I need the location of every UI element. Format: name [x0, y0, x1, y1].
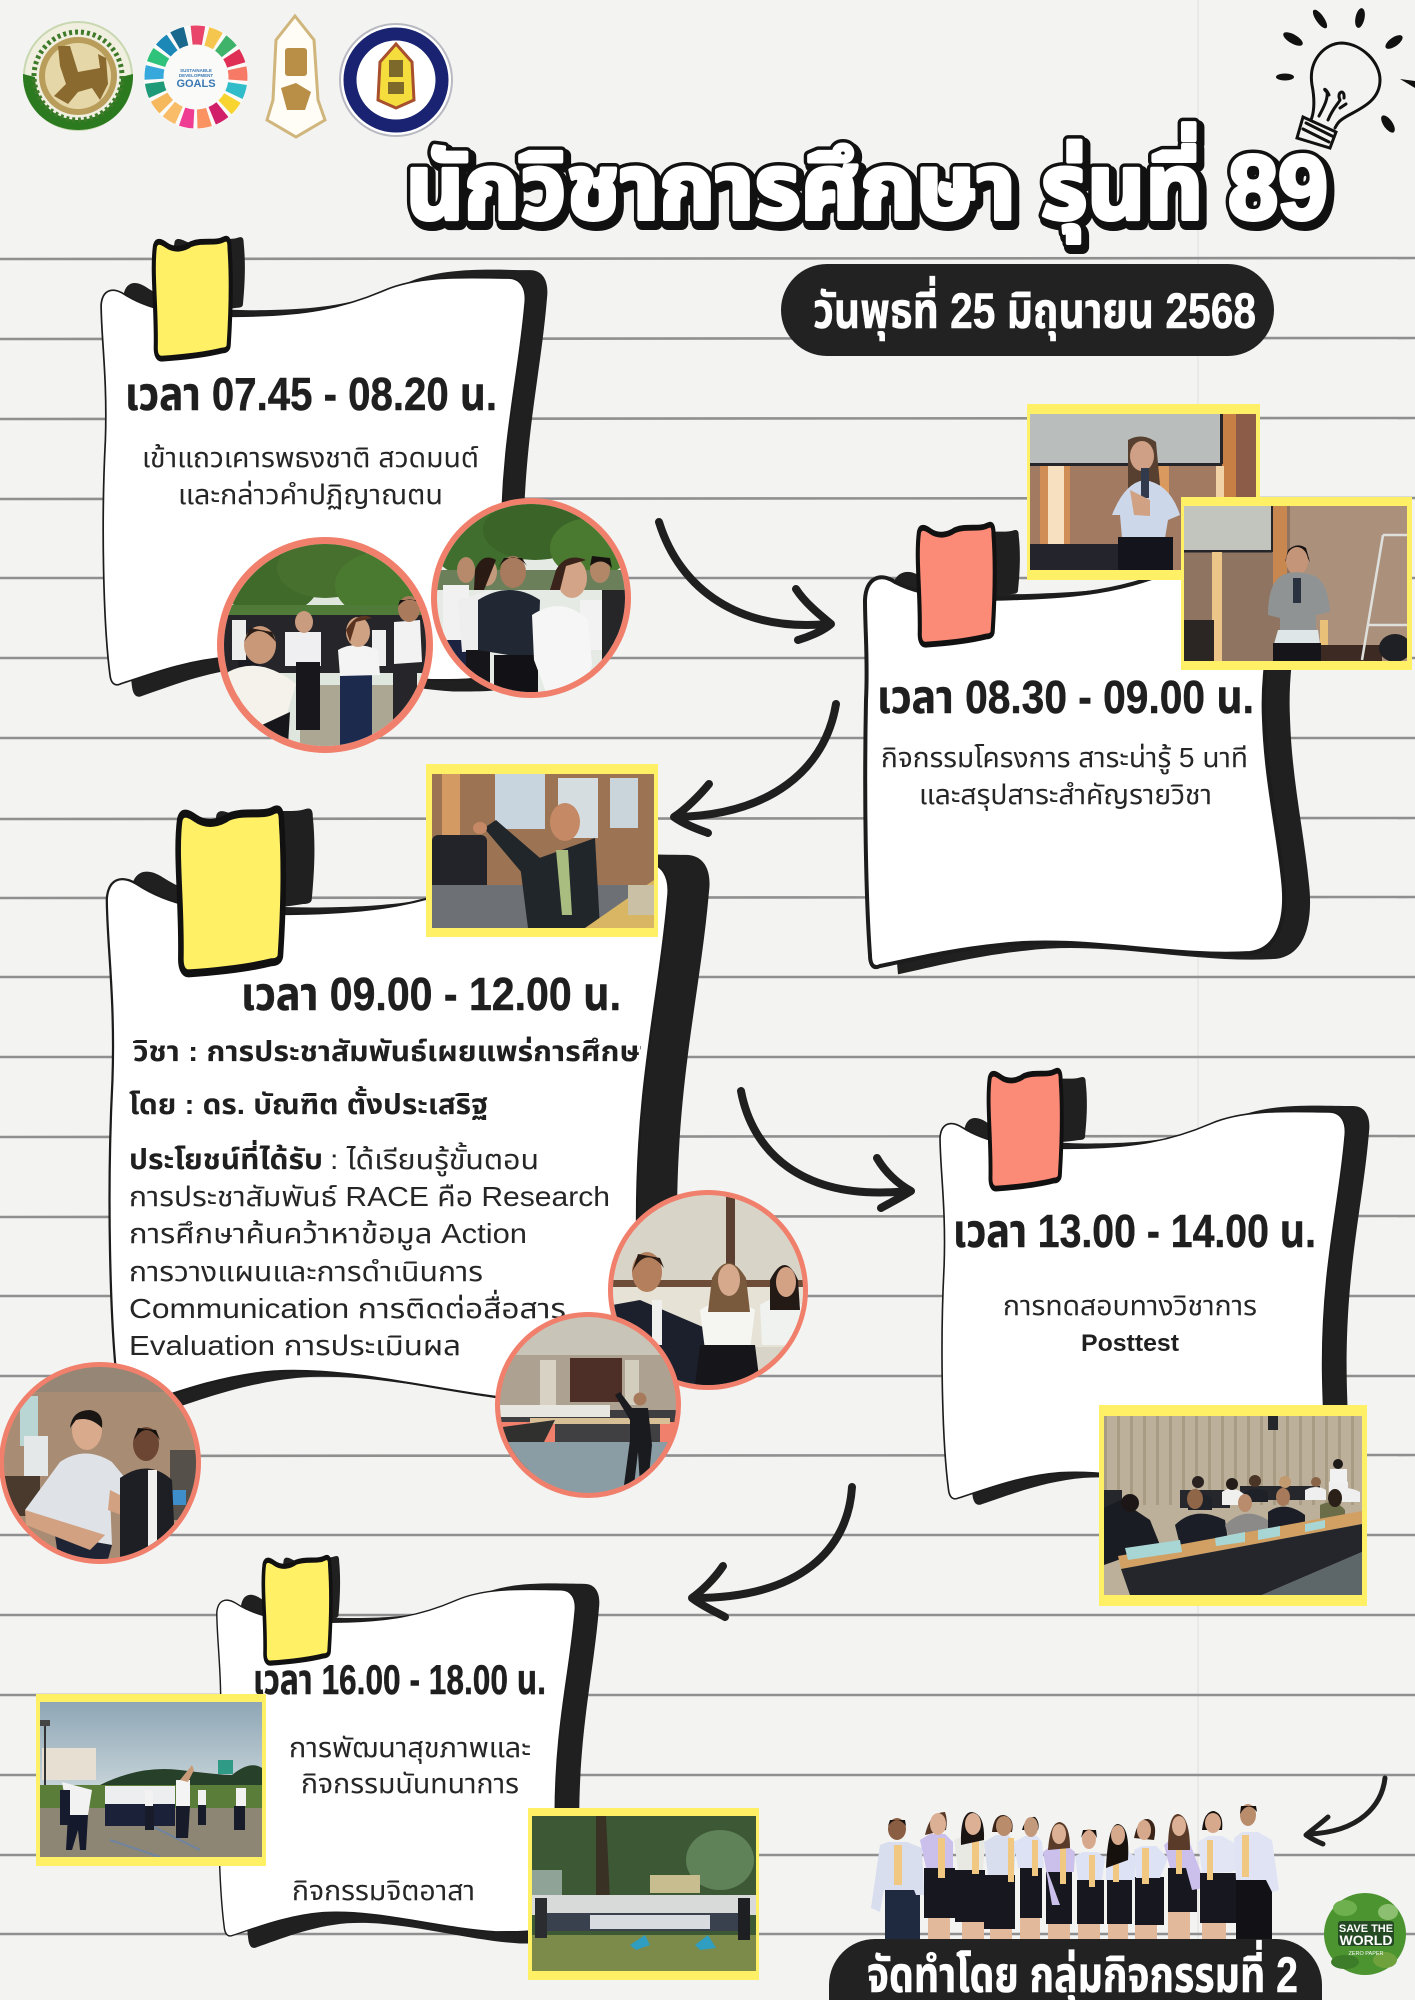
photo circle: three women seated: [608, 1190, 808, 1390]
panel: 16.00-18.00 activities: [36, 1556, 759, 1980]
time heading: เวลา 13.00 - 14.00 น.: [953, 1205, 1316, 1257]
photo circle: students in line: [431, 498, 631, 700]
paper shape: [101, 270, 547, 697]
arrow: first to second: [659, 522, 831, 640]
tape: yellow: [178, 808, 314, 973]
tape: yellow: [154, 237, 245, 359]
logo: sustainable development goals wheel: [137, 18, 255, 136]
photo: outdoor exercise: [36, 1694, 266, 1866]
photo: volunteer group under trees: [528, 1808, 759, 1980]
benefits paragraph: การประชาสัมพันธ์ RACE คือ Research: [129, 1181, 610, 1212]
description: และกล่าวคำปฏิญาณตน: [178, 479, 443, 510]
photo circle: meeting room: [495, 1312, 682, 1500]
photo: exam room: [1099, 1405, 1367, 1606]
benefits paragraph: : ได้เรียนรู้ขั้นตอน: [330, 1142, 539, 1177]
description: กิจกรรมนันทนาการ: [301, 1768, 519, 1799]
paper shape: [865, 545, 1310, 974]
benefits paragraph: การศึกษาค้นคว้าหาข้อมูล Action: [129, 1218, 527, 1251]
time heading: เวลา 07.45 - 08.20 น.: [125, 368, 497, 420]
logo: department of local administration: [23, 22, 133, 130]
photo: student speaker: [1027, 404, 1260, 580]
time heading: เวลา 08.30 - 09.00 น.: [877, 671, 1254, 723]
tape: salmon: [918, 525, 1020, 645]
photo circle: crowd under trees: [217, 537, 435, 753]
badge: save the world zero paper: [1324, 1893, 1406, 1975]
panel: morning assembly 07.45-08.20: [101, 237, 631, 753]
paper shape: [217, 1583, 599, 1948]
badge: save the world zero paper: SAVE THE: [1339, 1923, 1393, 1935]
logo: sustainable development goals wheel: SUSTAINABLE: [180, 68, 212, 73]
description: เข้าแถวเคารพธงชาติ สวดมนต์: [142, 442, 479, 473]
paper shape: [107, 854, 710, 1415]
time heading: เวลา 16.00 - 18.00 น.: [253, 1656, 546, 1703]
arrow: toward group photo: [1306, 1778, 1385, 1844]
title: นักวิชาการศึกษา รุ่นที่ 89: [406, 123, 1328, 243]
description: กิจกรรมโครงการ สาระน่ารู้ 5 นาที: [881, 742, 1248, 775]
description: [289, 1732, 531, 1906]
arrow: fourth to fifth: [692, 1487, 852, 1617]
photo: teacher speaker: [1181, 497, 1412, 670]
logo: sustainable development goals wheel: GOALS: [176, 78, 216, 90]
badge: save the world zero paper: WORLD: [1340, 1932, 1392, 1948]
panel: 09.00-12.00 lecture: [0, 764, 808, 1570]
title: นักวิชาการศึกษา รุ่นที่ 89: [406, 123, 1328, 243]
title: นักวิชาการศึกษา รุ่นที่ 89: [409, 127, 1331, 247]
photo: lecturer pointing: [426, 764, 658, 937]
footer pill: organiser credit: [829, 1939, 1322, 2000]
group photo of students: [871, 1804, 1279, 1940]
logo: sustainable development goals wheel: DEVELOPMENT: [179, 73, 213, 78]
benefits paragraph: ประโยชน์ที่ได้รับ: [129, 1139, 323, 1175]
photo circle: two men: [0, 1362, 201, 1570]
tape: yellow: [263, 1556, 340, 1663]
description: การพัฒนาสุขภาพและ: [289, 1732, 531, 1764]
description: [1003, 1290, 1257, 1357]
description: กิจกรรมจิตอาสา: [292, 1875, 475, 1906]
time heading: เวลา 09.00 - 12.00 น.: [241, 968, 621, 1020]
panel: 13.00-14.00 posttest: [940, 1071, 1369, 1606]
lecturer line: โดย : ดร. บัณฑิต ตั้งประเสริฐ: [129, 1085, 488, 1120]
benefits paragraph: [129, 1139, 610, 1361]
logo: academic class 89 seal: [340, 24, 452, 136]
tape: salmon: [989, 1071, 1087, 1189]
icon: light bulb: [1276, 7, 1415, 148]
description: [142, 442, 479, 510]
benefits paragraph: การวางแผนและการดำเนินการ: [129, 1256, 483, 1287]
description: Posttest: [1081, 1330, 1179, 1357]
date pill: วันพุธที่ 25 มิถุนายน 2568: [813, 276, 1256, 341]
logo: shield emblem: [267, 16, 325, 137]
arrow: third to fourth: [741, 1091, 911, 1208]
description: การทดสอบทางวิชาการ: [1003, 1290, 1257, 1321]
logos row: [23, 16, 452, 137]
date pill: [781, 264, 1274, 356]
paper shape: [940, 1106, 1369, 1505]
description: และสรุปสาระสำคัญรายวิชา: [919, 779, 1212, 811]
badge: save the world zero paper: ZERO PAPER: [1348, 1951, 1384, 1957]
description: [881, 742, 1248, 811]
subject line: วิชา : การประชาสัมพันธ์เผยแพร่การศึกษา: [132, 1036, 653, 1067]
panel: 08.30-09.00 project activity: [865, 404, 1412, 974]
benefits paragraph: Evaluation การประเมินผล: [129, 1330, 461, 1361]
arrow: second to third: [674, 704, 836, 833]
benefits paragraph: Communication การติดต่อสื่อสาร: [129, 1289, 566, 1324]
